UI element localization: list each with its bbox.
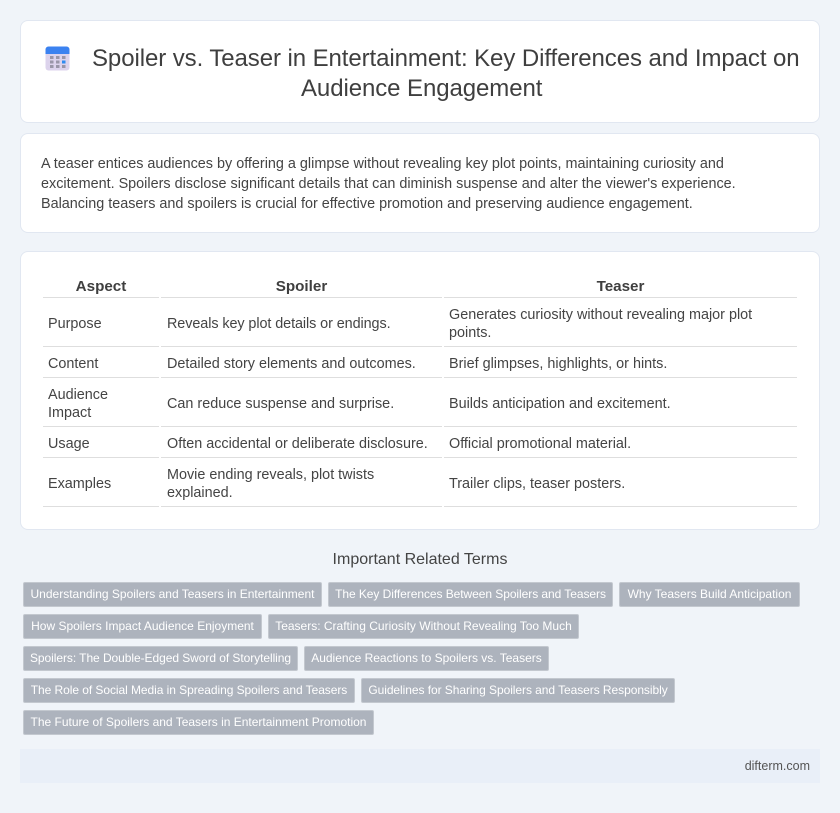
tag: Teasers: Crafting Curiosity Without Revealing Too Much [275, 619, 572, 633]
tag: Guidelines for Sharing Spoilers and Teasers Responsibly [368, 683, 668, 697]
text: Movie ending reveals, plot twists [167, 467, 374, 483]
row: Examples: Examples [48, 476, 111, 492]
row: Audience Impact: Impact [48, 405, 91, 421]
footer bar [20, 749, 820, 783]
tag [23, 646, 298, 671]
tag [23, 710, 374, 735]
tag [23, 678, 355, 703]
comparison table [43, 277, 797, 508]
intro paragraph: A teaser entices audiences by offering a glimpse without revealing key plot points, maintaining curiosity and [41, 156, 724, 172]
title [92, 45, 800, 102]
tag [328, 582, 613, 607]
tag: Understanding Spoilers and Teasers in Entertainment [31, 587, 314, 601]
table header: Aspect: Aspect [76, 278, 126, 295]
title: Spoiler vs. Teaser in Entertainment: Key Differences and Impact on [92, 45, 800, 72]
tag: Audience Reactions to Spoilers vs. Teasers [311, 651, 542, 665]
text: Generates curiosity without revealing major plot [449, 307, 752, 323]
row: Usage: Usage [48, 436, 90, 452]
row: Audience Impact: Audience [48, 387, 108, 403]
tag [361, 678, 675, 703]
row: Audience Impact [48, 387, 108, 421]
table header: Spoiler: Spoiler [276, 278, 327, 295]
panel: title card [20, 20, 820, 123]
icon: calendar [46, 46, 70, 70]
panel: comparison table [20, 251, 820, 530]
title: Audience Engagement [301, 75, 542, 102]
tag: The Key Differences Between Spoilers and Teasers [335, 587, 606, 601]
text: Trailer clips, teaser posters. [449, 476, 625, 492]
tag: How Spoilers Impact Audience Enjoyment [31, 619, 254, 633]
tag [23, 582, 322, 607]
tag: Spoilers: The Double-Edged Sword of Storytelling [30, 651, 291, 665]
tag [619, 582, 800, 607]
tag: The Future of Spoilers and Teasers in Entertainment Promotion [31, 715, 366, 729]
tag: The Role of Social Media in Spreading Spoilers and Teasers [31, 683, 347, 697]
text: explained. [167, 485, 233, 501]
text: Brief glimpses, highlights, or hints. [449, 356, 667, 372]
text: Reveals key plot details or endings. [167, 316, 390, 332]
text: Often accidental or deliberate disclosure. [167, 436, 428, 452]
intro paragraph: excitement. Spoilers disclose significant details that can diminish suspense and alter the viewer's experience. [41, 176, 736, 192]
heading: related terms: Important Related Terms [333, 551, 507, 568]
text: Can reduce suspense and surprise. [167, 396, 394, 412]
row: Purpose: Purpose [48, 316, 102, 332]
tag: Why Teasers Build Anticipation [628, 587, 791, 601]
text: Builds anticipation and excitement. [449, 396, 671, 412]
row: Content: Content [48, 356, 98, 372]
intro paragraph [41, 156, 736, 212]
tag [23, 614, 262, 639]
tag [268, 614, 579, 639]
text: points. [449, 325, 491, 341]
text: Detailed story elements and outcomes. [167, 356, 416, 372]
intro paragraph: Balancing teasers and spoilers is crucial for effective promotion and preserving audience engagement. [41, 196, 693, 212]
table header: Teaser: Teaser [597, 278, 644, 295]
panel: intro text [20, 133, 820, 233]
tag [304, 646, 549, 671]
footer: site name: difterm.com [745, 759, 810, 773]
related terms tags [23, 582, 800, 735]
text: Official promotional material. [449, 436, 631, 452]
